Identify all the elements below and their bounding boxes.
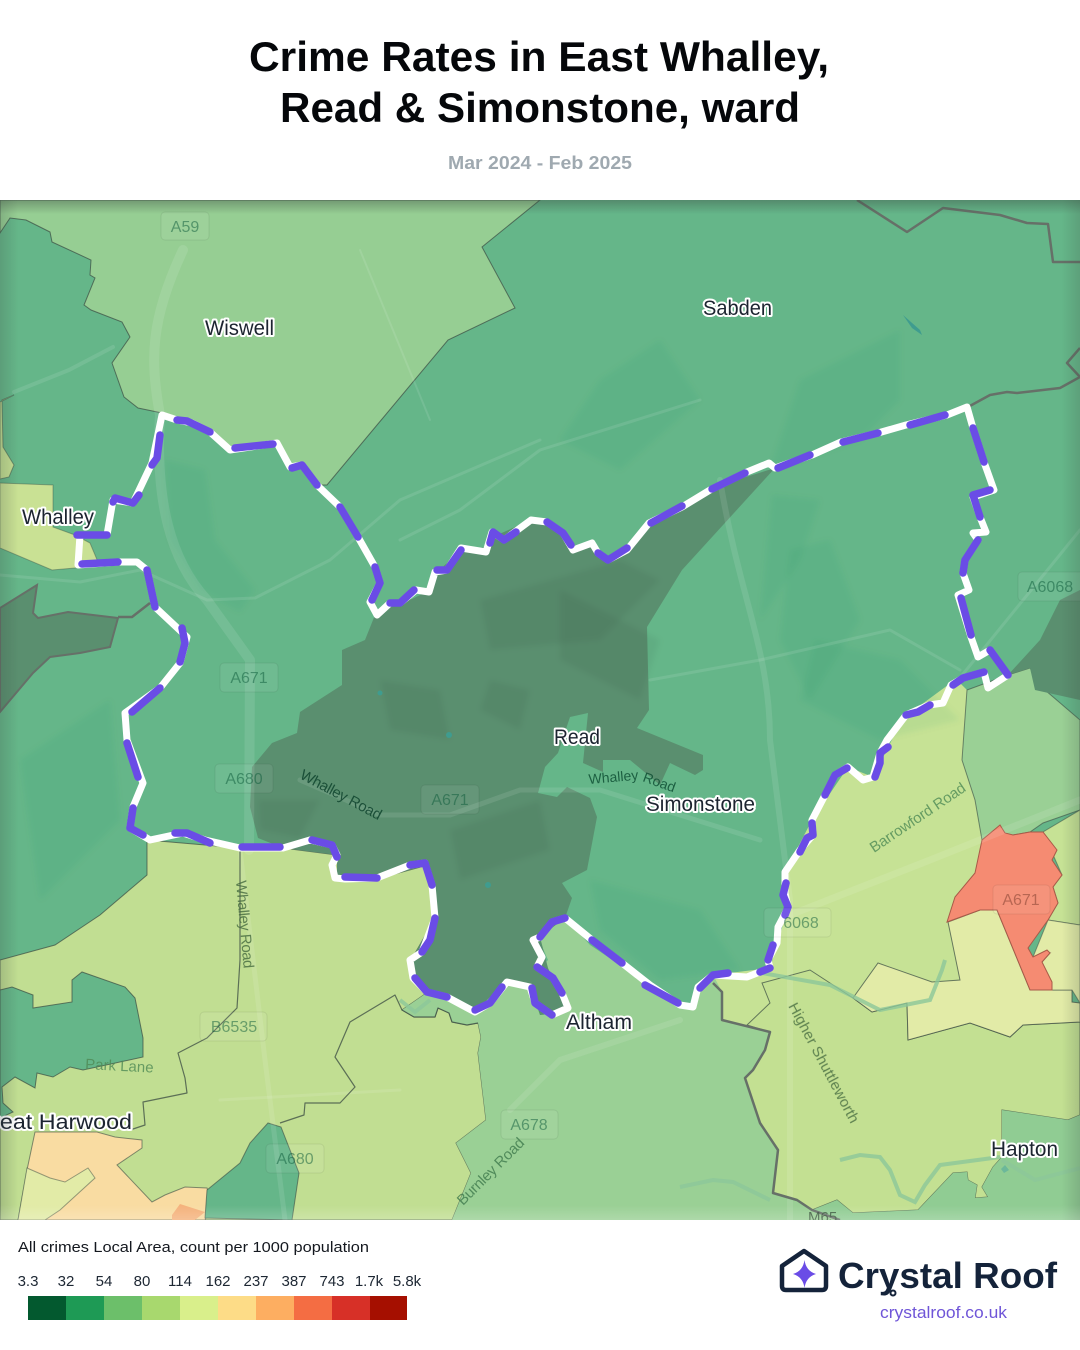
legend values: 5.8k	[393, 1273, 422, 1290]
road shields: A59	[171, 219, 199, 236]
map edge fade	[0, 200, 1080, 1220]
legend values: 237	[243, 1273, 269, 1290]
road shields: A680	[276, 1151, 314, 1168]
region: north-west teal patch	[0, 972, 143, 1118]
region: lower right	[745, 970, 1080, 1213]
woodland shading	[786, 546, 956, 736]
choropleth map panel	[0, 200, 1080, 1226]
region: eastern dark	[1008, 590, 1080, 700]
legend values: 162	[205, 1273, 231, 1290]
road shields: A680	[225, 771, 263, 788]
region: pale yellow	[853, 910, 1080, 1040]
region: Great Harwood pale	[18, 1168, 95, 1220]
legend values: 80	[134, 1273, 150, 1290]
legend	[18, 1239, 422, 1320]
region: north-west pale fragment	[0, 395, 14, 479]
place labels: Altham	[566, 1011, 632, 1034]
region: Wiswell	[0, 200, 540, 485]
road shields: A671	[1002, 892, 1040, 909]
place labels: Hapton	[991, 1138, 1058, 1161]
region: central dark area	[250, 468, 775, 1015]
title: Crime Rates in East Whalley,	[249, 33, 829, 80]
legend values: 3.3	[18, 1273, 38, 1290]
white boundary line	[78, 407, 1008, 1015]
region: far-right light green	[1043, 810, 1080, 925]
legend colour scale	[28, 1296, 407, 1320]
website url: crystalroof.co.uk	[880, 1304, 1008, 1322]
region: bottom right	[812, 1110, 1080, 1220]
region: Great Harwood peach	[18, 1132, 212, 1220]
road names: M65	[808, 1209, 837, 1226]
road names: Higher Shuttleworth	[784, 1000, 862, 1126]
road names: Barrowford Road	[867, 780, 969, 856]
boundary lines	[857, 200, 1080, 262]
road shields: A6068	[1027, 579, 1073, 596]
region: red high-crime area	[947, 825, 1062, 990]
wordmark: Crystal Roof	[838, 1255, 1058, 1296]
legend values: 54	[96, 1273, 112, 1290]
place labels: Read	[554, 726, 600, 749]
purple dashes	[77, 415, 1008, 1015]
legend title: All crimes Local Area, count per 1000 population	[18, 1239, 369, 1256]
road names: Road	[641, 769, 678, 795]
road names: Whalley Road	[232, 880, 257, 969]
roads	[0, 250, 1080, 1220]
road shields: A678	[510, 1117, 548, 1134]
ward boundary	[77, 407, 1008, 1015]
ponds	[378, 315, 1009, 1173]
region: A680 teal patch	[205, 1123, 299, 1220]
road shields: A671	[431, 792, 469, 809]
subtitle: date range: Mar 2024 - Feb 2025	[448, 153, 632, 173]
logo: Crystal Roof	[782, 1251, 1058, 1322]
place labels: Wiswell	[205, 317, 274, 340]
road names: Whalley Road	[297, 767, 385, 824]
rivers	[399, 960, 1000, 1204]
road names: Burnley Road	[454, 1135, 528, 1209]
region: eastern mid green	[962, 668, 1080, 840]
legend values: 1.7k	[355, 1273, 384, 1290]
place labels: Sabden	[703, 297, 772, 320]
region: western dark area	[0, 585, 118, 712]
title: Read & Simonstone, ward	[280, 84, 800, 131]
place labels	[0, 297, 1058, 1161]
place labels: Simonstone	[646, 793, 755, 816]
road shields: A671	[230, 670, 268, 687]
region: Altham	[402, 918, 840, 1220]
road shields: 6068	[783, 915, 819, 932]
place labels: Whalley	[22, 506, 94, 529]
road names: Whalley	[588, 767, 639, 787]
legend values	[18, 1273, 422, 1290]
legend values: 387	[281, 1273, 307, 1290]
region: Whalley	[0, 483, 98, 570]
road names	[85, 767, 969, 1226]
region: lower centre-left	[0, 840, 486, 1220]
icon: house with star	[782, 1251, 826, 1290]
region: orange fragment	[172, 1204, 205, 1220]
region: Barrowford	[713, 683, 982, 1032]
legend values: 32	[58, 1273, 74, 1290]
legend values: 743	[319, 1273, 345, 1290]
road shields	[161, 212, 1080, 1173]
road names: Park Lane	[85, 1056, 154, 1077]
legend values: 114	[168, 1273, 192, 1290]
road shields: B6535	[211, 1019, 257, 1036]
title	[249, 33, 829, 131]
